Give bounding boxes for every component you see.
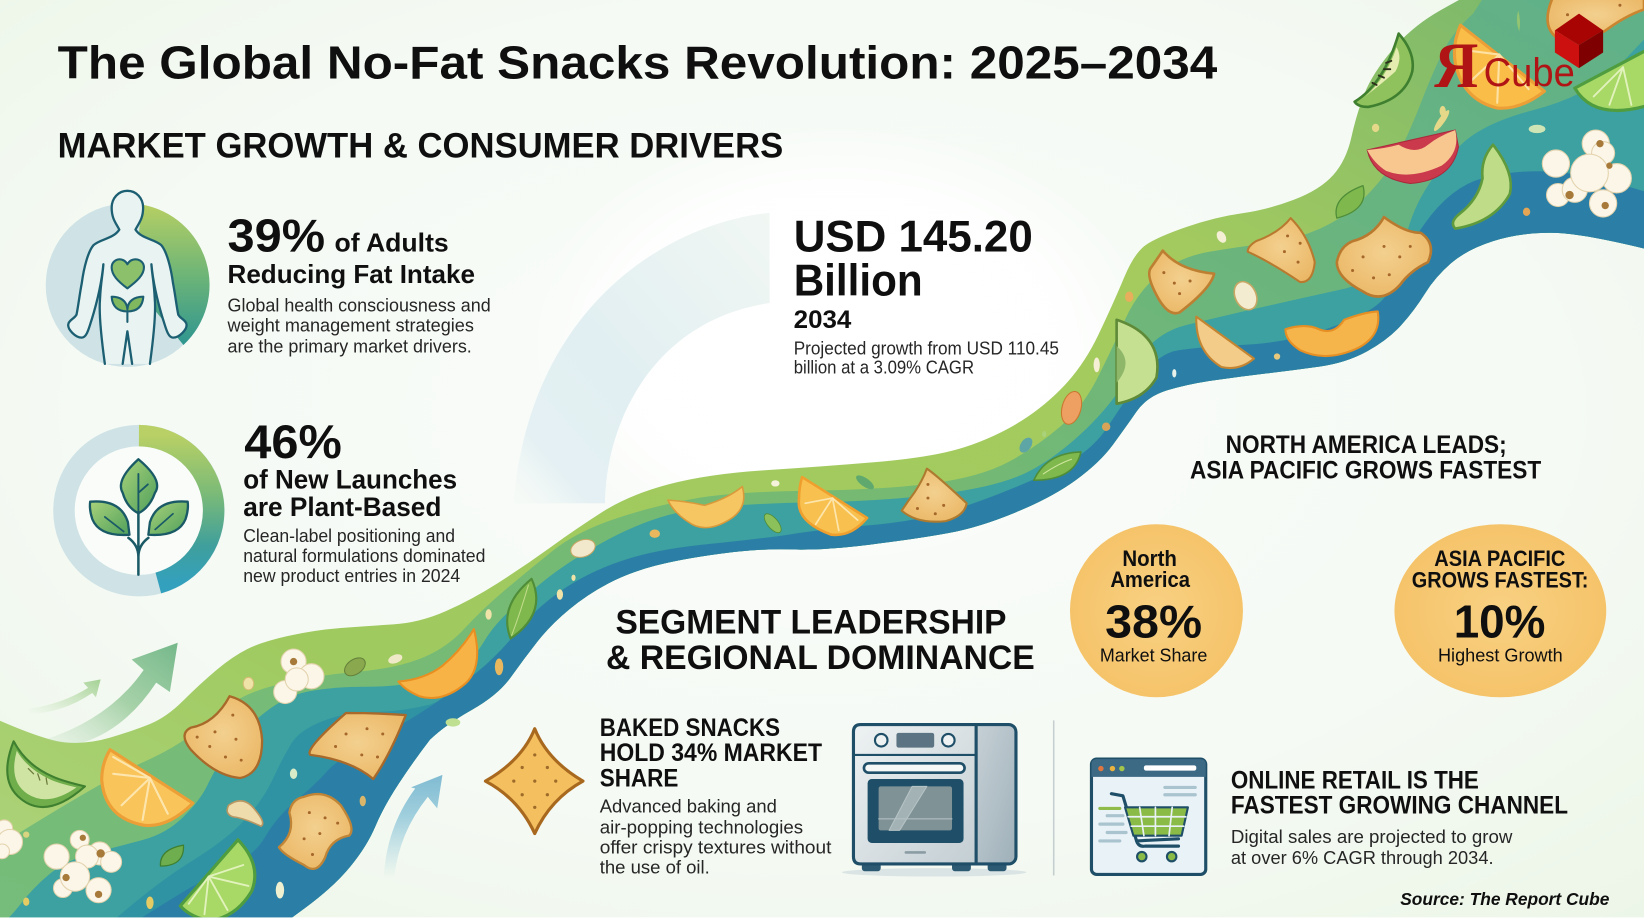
panel: plant-based launches: natural formulations dominated	[243, 545, 485, 566]
forecast description: Projected growth from USD 110.45	[794, 337, 1059, 358]
description: Advanced baking and	[600, 796, 777, 817]
forecast value: USD 145.20	[794, 213, 1033, 262]
chip lower	[279, 794, 351, 869]
callout: asia pacific: Highest Growth	[1438, 645, 1563, 666]
callout: north america: America	[1110, 567, 1191, 592]
wedge upper	[1196, 317, 1254, 368]
panel: baked snacks	[485, 714, 1026, 877]
leaf top	[1336, 186, 1364, 218]
panel: online retail: FASTEST GROWING CHANNEL	[1231, 792, 1568, 820]
panel: online retail	[1091, 759, 1568, 874]
chip top right	[1548, 0, 1644, 38]
leaf center right	[1034, 452, 1081, 480]
heading: ONLINE RETAIL IS THE	[1231, 766, 1479, 794]
cantaloupe upper	[1285, 311, 1378, 356]
lime wedge lower	[180, 840, 255, 921]
source note: Source: The Report Cube	[1400, 889, 1610, 909]
logo: RCube: Cube	[1484, 51, 1575, 95]
popcorn top	[1542, 130, 1631, 217]
panel: market forecast: billion at a 3.09% CAGR	[794, 356, 974, 377]
callout: asia pacific: ASIA PACIFIC	[1434, 546, 1565, 571]
panel: market forecast: Billion	[794, 257, 923, 306]
crescent chip	[668, 487, 744, 528]
small specks upper	[1017, 11, 1545, 455]
stat: 46%	[244, 415, 342, 468]
stat: 39%	[228, 210, 325, 262]
heading: market growth: MARKET GROWTH & CONSUMER DRIVERS	[58, 126, 783, 165]
callout: north america	[1070, 524, 1243, 697]
panel: plant-based launches	[64, 415, 485, 586]
panel: plant-based launches: of New Launches	[243, 464, 457, 495]
panel: adults reducing fat: weight management strategies	[227, 314, 474, 335]
icon: oven	[842, 725, 1026, 877]
divider	[1053, 720, 1055, 875]
panel: adults reducing fat: are the primary market drivers.	[228, 335, 472, 356]
orange top	[1454, 25, 1544, 108]
logo: RCube: Я	[1434, 30, 1478, 102]
chip blob upper	[1337, 217, 1431, 297]
panel: plant-based launches: new product entries in 2024	[243, 565, 460, 586]
leaf lower	[160, 845, 184, 866]
callout: north america: 38%	[1105, 595, 1202, 647]
panel: baked snacks: HOLD 34% MARKET	[600, 739, 823, 767]
forecast year: 2034	[794, 306, 851, 334]
bottom strip	[0, 917, 1644, 924]
panel: regional heading: NORTH AMERICA LEADS;	[1226, 431, 1507, 459]
heading: segment leadership: & REGIONAL DOMINANCE	[606, 639, 1035, 677]
white glow behind forecast	[524, 126, 1153, 566]
arrow: large green	[46, 643, 178, 743]
title: The Global No-Fat Snacks Revolution: 2025–2034	[58, 37, 1217, 89]
avocado top	[1453, 145, 1511, 229]
description: Digital sales are projected to grow	[1231, 826, 1513, 847]
popcorn lower	[44, 830, 122, 903]
description: Global health consciousness and	[228, 294, 491, 315]
heading: segment leadership: SEGMENT LEADERSHIP	[615, 603, 1007, 641]
heading: BAKED SNACKS	[600, 714, 780, 742]
panel: adults reducing fat	[46, 191, 491, 367]
panel: baked snacks: SHARE	[600, 764, 678, 792]
orange wedge left	[102, 750, 193, 826]
seed	[570, 538, 596, 558]
panel: market forecast	[794, 213, 1059, 377]
panel: online retail: at over 6% CAGR through 2034.	[1231, 847, 1494, 868]
arrow: blue	[384, 775, 442, 879]
popcorn edge	[0, 820, 23, 859]
cantaloupe crescent	[398, 629, 477, 698]
leaf	[507, 579, 536, 639]
panel: regional heading: ASIA PACIFIC GROWS FASTEST	[1190, 457, 1542, 485]
panel: adults reducing fat: of Adults	[334, 228, 449, 258]
panel: baked snacks: the use of oil.	[600, 856, 710, 877]
panel: plant-based launches: are Plant-Based	[243, 491, 441, 522]
apple slice	[1367, 130, 1458, 184]
seed upper	[1233, 280, 1258, 310]
panel: regional heading	[1190, 431, 1542, 485]
chip	[185, 696, 262, 778]
callout: asia pacific	[1394, 524, 1606, 697]
callout: north america: North	[1122, 546, 1177, 571]
icon: browser with cart	[1091, 759, 1206, 874]
orange wedge center	[799, 477, 867, 535]
logo: RCube	[1434, 14, 1603, 102]
arrow: small green	[29, 679, 101, 714]
icon: cracker	[485, 729, 583, 834]
chip center	[902, 469, 967, 522]
avocado mid	[1117, 320, 1157, 404]
pale growth arc	[514, 213, 770, 503]
icon: ring with plant	[64, 436, 214, 586]
chip left upper	[1149, 251, 1214, 313]
small leaves center	[761, 473, 876, 535]
almond oval	[1060, 391, 1082, 425]
heading: segment leadership	[606, 603, 1035, 677]
panel: adults reducing fat: Reducing Fat Intake	[228, 259, 475, 289]
chip triangle	[310, 713, 406, 779]
icon: human body with heart	[46, 191, 210, 367]
panel: baked snacks: offer crispy textures without	[600, 836, 831, 857]
panel: baked snacks: air-popping technologies	[600, 817, 803, 838]
callout: asia pacific: 10%	[1454, 595, 1545, 647]
popcorn mid	[274, 649, 324, 704]
kiwi top	[1355, 34, 1413, 107]
callout: north america: Market Share	[1100, 645, 1207, 666]
callout: asia pacific: GROWS FASTEST:	[1412, 568, 1588, 593]
seed olive	[344, 657, 366, 676]
seeds and specks	[23, 480, 780, 909]
lime top right	[1575, 50, 1644, 110]
kiwi slice left	[7, 741, 85, 807]
nut	[227, 801, 263, 826]
description: Clean-label positioning and	[243, 525, 455, 546]
chip triangle upper	[1248, 218, 1315, 282]
